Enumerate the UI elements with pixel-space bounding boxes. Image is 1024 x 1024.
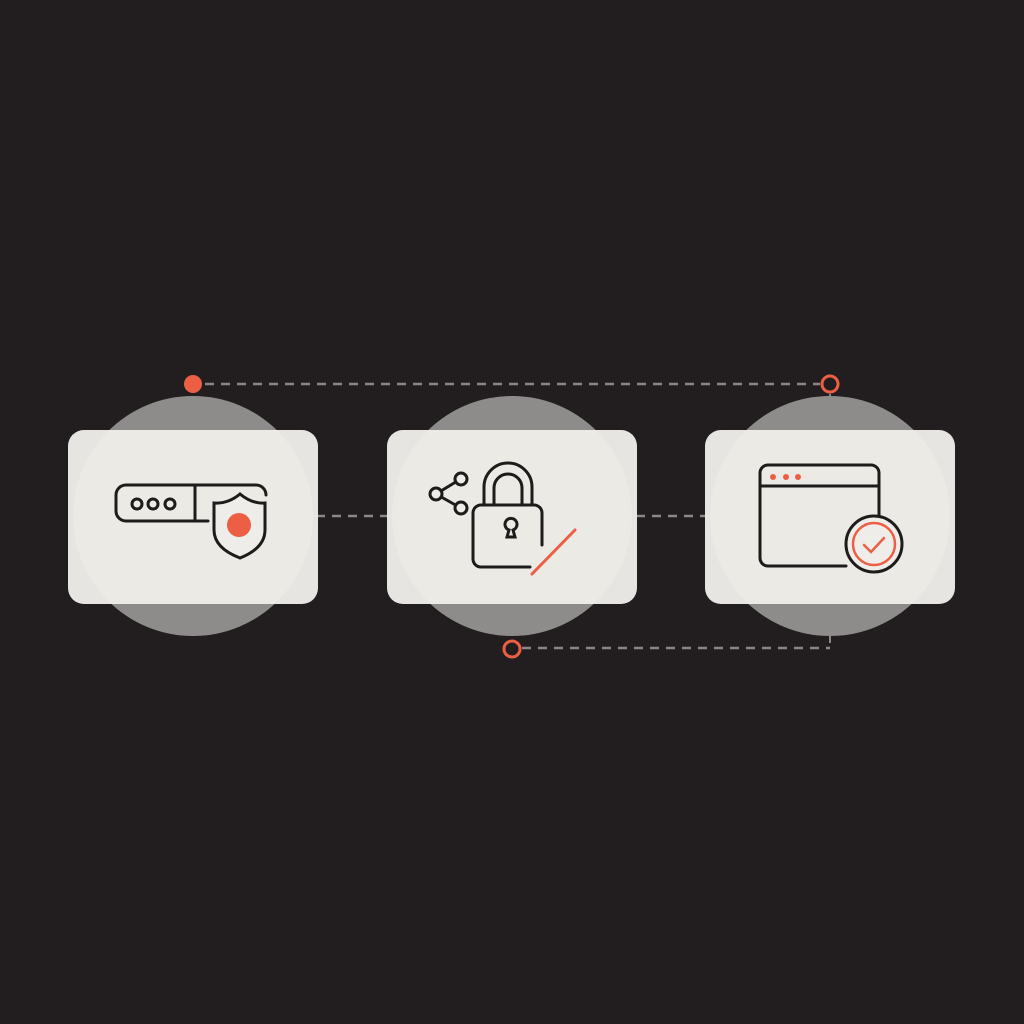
- panel: lock sharing: [387, 396, 637, 636]
- connector: right vertical dashed line: [829, 394, 831, 648]
- node: orange ring top right: [822, 376, 838, 392]
- connector: middle dashed line: [300, 515, 720, 517]
- icon: padlock with share: [430, 463, 542, 567]
- panel: verified browser: [705, 396, 955, 636]
- connector: bottom dashed line: [522, 647, 830, 649]
- icon: browser window with check badge: [760, 465, 902, 572]
- icon: red slash: [532, 530, 575, 574]
- connector: top dashed line: [205, 383, 820, 385]
- icon: password field with shield: [116, 485, 266, 558]
- node: filled orange dot: [184, 375, 202, 393]
- node: orange ring bottom: [504, 641, 520, 657]
- panel: password security: [68, 396, 318, 636]
